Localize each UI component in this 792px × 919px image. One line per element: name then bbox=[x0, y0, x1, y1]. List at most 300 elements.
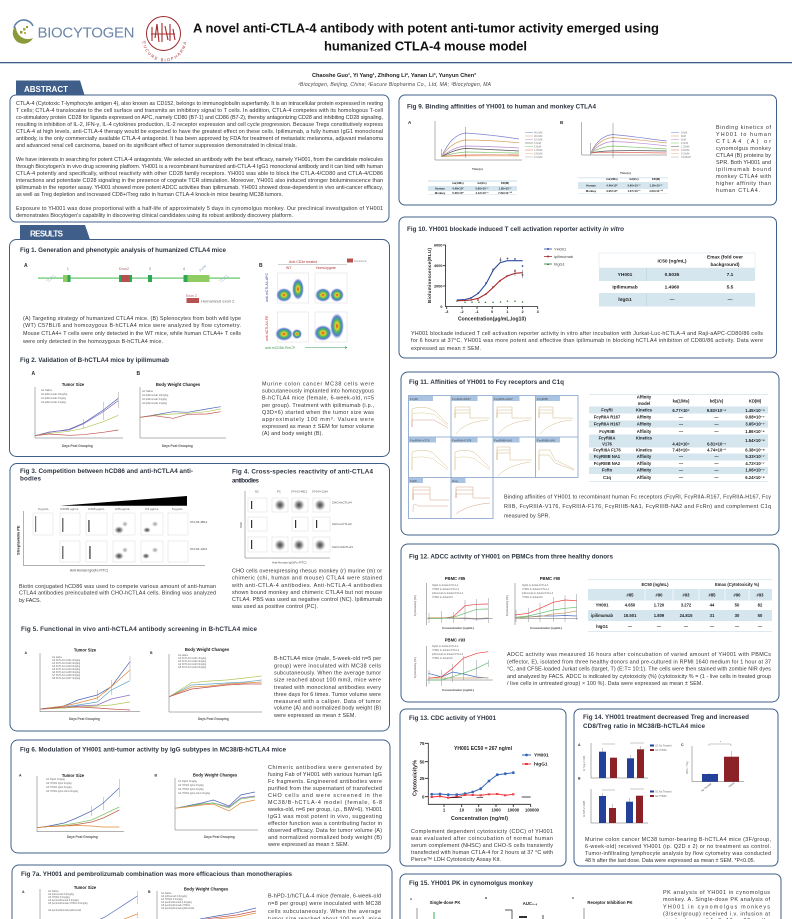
fig 14 caption: Murine colon cancer MC38 tumor-bearing B-hCTLA4 mice (3F/group, bbox=[585, 837, 772, 843]
panel: figures 1 and 2 bbox=[10, 240, 390, 456]
fig 10 dose-response chart: Bioluminescence(RLU) bbox=[427, 248, 432, 303]
fig 12 chart: PBMC #93: ipilimumab & Jurkat-hCTLA-4 bbox=[432, 653, 464, 656]
fig 15 caption: monkey. A. Single-dose PK analysis of bbox=[663, 897, 770, 903]
fig 11 table: model bbox=[638, 401, 650, 406]
fig 7a tumor size chart: G4 pembrolizumab 3.0mg/kg bbox=[48, 899, 79, 902]
fig 9A sensorgram: 10.0nM bbox=[534, 138, 542, 142]
fig 7a body weight chart: Body Weight Changes bbox=[184, 886, 229, 892]
fig 15C receptor inhibition chart bbox=[572, 896, 633, 919]
fig 13 caption: serum complement (NHSC) and CHO-S cells transiently bbox=[411, 843, 553, 849]
fig 9A sensorgram: 20.0nM bbox=[534, 135, 542, 138]
results tab: RESULTS bbox=[30, 230, 64, 238]
fig 5B body weight chart: G1 saline bbox=[178, 654, 189, 657]
fig 3 competition flow plots: Anti-Human IgG(Fc-FITC) bbox=[70, 568, 108, 572]
fig 12 heading: Fig 12. ADCC activity of YH001 on PBMCs from three healthy donors bbox=[409, 554, 613, 560]
authors: Chaoshe Guo¹, Yi Yang¹, Zhihong Li², Yanan Li³, Yunyun Chen³ bbox=[312, 72, 476, 79]
fig 6 caption: MC38/B-hCTLA-4 model (female, 6-8 bbox=[268, 800, 382, 806]
fig 14C bar chart: YH001 bbox=[728, 781, 736, 789]
fig 5 caption: B-hCTLA4 mice (male, 5-week-old n=5 per bbox=[274, 656, 381, 662]
fig 9B sensorgram: 0.31nM bbox=[681, 152, 689, 156]
fig 2B body weight chart: Body Weight Changes bbox=[156, 382, 201, 387]
fig 15 caption: (3/sex/group) received i.v. infusion at bbox=[663, 911, 770, 917]
logo: Eucure Biopharma bbox=[142, 16, 186, 62]
fig 15B AUC chart bbox=[485, 896, 543, 919]
fig 7a body weight chart: G4 pembrolizumab 3.0mg/kg bbox=[161, 901, 192, 904]
fig 2B body weight chart: Days Post Grouping bbox=[162, 444, 193, 448]
fig 9B sensorgram: 0.62nM bbox=[681, 149, 689, 152]
fig 6 caption: weeks-old, n=6 per group, i.p., BIW×6). YH001 bbox=[267, 807, 382, 813]
fig 12 chart: PBMC #93: PBMC #93 bbox=[445, 638, 466, 642]
fig 11 table: — bbox=[679, 454, 684, 459]
fig 11 table: Affinity bbox=[637, 454, 652, 459]
fig 7a tumor size chart: G3 YH001 3.0mg/kg bbox=[48, 896, 70, 899]
fig 14C bar chart: * bbox=[720, 740, 722, 744]
fig 12 chart: PBMC #93 bbox=[413, 638, 493, 692]
fig 13 caption bbox=[410, 829, 553, 863]
fig 13 caption: was evaluated after coincubation of normal human bbox=[410, 836, 553, 842]
abstract frame bbox=[10, 95, 389, 222]
fig 9A table: 7.69×10⁻¹⁰ bbox=[498, 191, 513, 195]
fig 9B sensorgram: 0.156nM bbox=[681, 156, 691, 159]
abstract text: co-stimulatory protein CD28 for ligands expressed on APC, namely CD80 (B7-1) and CD86 (B7-2), thereby antagonizing CD28 and inhibiting CD28 signaling, bbox=[16, 115, 384, 121]
fig 1B flow cytometry plots bbox=[259, 258, 367, 350]
fig 7a tumor size chart: G5 pembrolizumab+YH001 3.0mg/kg bbox=[48, 902, 88, 905]
fig 10 caption bbox=[411, 331, 763, 352]
fig 10 table: YH001 bbox=[618, 272, 633, 278]
fig 2 caption: Murine colon cancer MC38 cells were bbox=[262, 382, 374, 388]
fig 10 dose-response chart: 1 bbox=[506, 310, 508, 314]
fig 12 table: #93 bbox=[756, 592, 764, 598]
fig 11 SPR thumbnail grid bbox=[408, 396, 578, 518]
fig 9A table: 5.60×10⁻⁴ bbox=[475, 186, 489, 190]
fig 5A tumor size chart: G5 hCTLA4 mAb4 3mg/kg bbox=[52, 668, 81, 671]
fig 13 CDC chart: 25 bbox=[420, 776, 425, 781]
fig 6B body weight chart: G1 hIgG1 3mg/kg bbox=[178, 780, 198, 783]
fig 10 table: 7.1 bbox=[727, 272, 734, 278]
fig 12 table: EC50 (ng/mL) bbox=[642, 582, 669, 587]
fig 4 caption: shown bound monkey and chimeric CTLA4 but not mouse bbox=[232, 590, 382, 596]
fig 9A sensorgram: A bbox=[408, 120, 412, 125]
fig 3 competition flow plots: 5 µg/mL bbox=[172, 507, 183, 511]
fig 10 dose-response chart: -2 bbox=[460, 310, 464, 314]
fig 12 caption: (effector, E), isolated from three healthy donors and pre-cultured in RPMI 1640 medium for 1 hour at 37 bbox=[507, 659, 771, 665]
panel: figure 10 bbox=[399, 217, 776, 358]
fig 11 table: 6.24×10⁻⁸ bbox=[745, 475, 765, 480]
fig 9 caption: cynomolgus monkey bbox=[716, 146, 771, 152]
fig 5B body weight chart: G3 hCTLA4 mAb2 3mg/kg bbox=[178, 660, 207, 663]
abstract text: We have interests in searching for potent CTLA-4 antagonists. We selected an antibody with the best efficacy, namely YH001, from the candidate molecules bbox=[16, 157, 383, 163]
fig 6A tumor size chart: G2 YH001 IgG1 3mg/kg bbox=[46, 782, 72, 785]
fig 4 cross-species flow plots: NC bbox=[255, 490, 259, 494]
fig 9 caption: monkey CTLA4 with bbox=[716, 174, 771, 180]
abstract text: antibody, is the only commercially available CTLA-4 antagonist. It has been approved by FDA for treatment of metastatic melanoma, adjuvant melanoma bbox=[16, 136, 383, 142]
fig 5A tumor size chart: G8 hCTLA4 mAb7 3mg/kg bbox=[52, 677, 81, 680]
fig 2 caption: Q3D×6) started when the tumor size was bbox=[262, 410, 374, 416]
fig 15 heading: Fig 15. YH001 PK in cynomolgus monkey bbox=[409, 880, 533, 887]
fig 1A targeting diagram: 3 bbox=[149, 267, 151, 271]
fig 5 caption: measured with a caliper. Data of tumor bbox=[274, 699, 381, 705]
fig 11 table: — bbox=[714, 468, 719, 473]
fig 14B bar chart: G1 No Treated bbox=[655, 790, 672, 794]
fig 12 table: YH001 bbox=[596, 602, 609, 608]
fig 11 table: FcγRIIIB NA2 bbox=[594, 461, 621, 466]
fig 6B body weight chart: Days Post Grouping bbox=[204, 835, 235, 839]
fig 3 heading: bodies bbox=[20, 476, 41, 483]
fig 5B body weight chart: Days Post Grouping bbox=[198, 717, 229, 721]
results tab bbox=[20, 225, 90, 240]
fig 14C bar chart: No Treated bbox=[701, 782, 713, 793]
fig 10 dose-response chart: 6000 bbox=[434, 244, 442, 248]
fig 9B sensorgram bbox=[560, 120, 691, 175]
fig 6B body weight chart: G4 YH001 IgG1-LALA 3mg/kg bbox=[178, 792, 211, 795]
fig 11 SPR thumbnail grid: C1q bbox=[452, 479, 458, 483]
panel: figures 3, 4 and 5 bbox=[10, 464, 390, 731]
fig 12 table: 30 bbox=[735, 613, 740, 618]
fig 14 caption: Tumor-infiltrating lymphocyte analysis by flow cytometry was conducted bbox=[585, 851, 771, 857]
fig 7a tumor size chart: G6 pembrolizumab+ipilimumab bbox=[48, 909, 82, 912]
fig 14A bar chart: % Treg of CD4 bbox=[583, 755, 586, 771]
fig 15B AUC chart: B bbox=[485, 896, 488, 900]
fig 9A table: ka(1/Ms) bbox=[452, 181, 464, 185]
fig 9B table: Monkey bbox=[586, 189, 597, 193]
fig 2 caption: expressed as mean ± SEM for tumor volume bbox=[262, 424, 374, 430]
panel: figure 15 bbox=[400, 874, 781, 919]
fig 11 caption: RIIB, FcγRIIIA-V176, FcγRIIIA-F176, FcγRIIIB-NA1, FcγRIIIB-NA2 and FcRn) and complement C1q bbox=[504, 504, 771, 510]
fig 10 table: — bbox=[670, 298, 675, 303]
fig 11 table: — bbox=[714, 422, 719, 426]
fig 14 heading: Fig 14. YH001 treatment decreased Treg and increased bbox=[583, 714, 749, 721]
fig 12 table: 31 bbox=[710, 613, 715, 618]
abstract text: resulting in inhibition of IL-2, IFN-γ, IL-4 cytokines production, IL-2 receptor expression and cell cycle progression. Because Tregs constitutively express bbox=[16, 122, 383, 128]
fig 12 chart: PBMC #93: Concentration (ng/mL) bbox=[442, 688, 474, 692]
fig 3 caption: by FACS. bbox=[19, 598, 41, 604]
fig 10 dose-response chart: 4000 bbox=[434, 264, 442, 268]
fig 6 caption: were expressed as mean ± SEM. bbox=[267, 842, 349, 848]
abstract text bbox=[16, 101, 384, 219]
fig 1B flow cytometry plots: Homozygote bbox=[316, 266, 336, 270]
abstract text: CTLA-4 at high levels, anti-CTLA-4 therapy would be expected to have the greatest effect on these cells. Ipilimumab, a fully human IgG1 monoclonal bbox=[16, 129, 383, 135]
fig 11 table: — bbox=[714, 475, 719, 480]
fig 13 caption: Complement dependent cytotoxicity (CDC) of YH001 bbox=[411, 829, 553, 835]
fig 1 caption: (A) Targeting strategy of humanized CTLA4 mice. (B) Splenocytes from both wild type bbox=[23, 316, 241, 322]
fig 11 SPR thumbnail grid: FcγRIIIA-V176 bbox=[410, 438, 430, 442]
panel: figure 12 bbox=[401, 544, 779, 702]
fig 12 caption: ADCC activity was measured 16 hours after coincubation of varied amount of YH001 with PBMCs bbox=[507, 652, 771, 658]
frame bbox=[400, 874, 781, 919]
fig 2B body weight chart: G3 ipilimumab 3mg/kg bbox=[142, 398, 167, 401]
fig 9A table: Human bbox=[435, 186, 445, 190]
fig 12 chart: PBMC #85: Cytotoxicity (%) bbox=[413, 595, 417, 616]
fig 5B body weight chart: G4 hCTLA4 mAb3 3mg/kg bbox=[178, 663, 207, 666]
fig 3 caption bbox=[19, 584, 216, 604]
fig 9A table: KD(M) bbox=[501, 181, 509, 185]
fig 9A sensorgram bbox=[408, 120, 542, 171]
fig 11 table: 6.77×10⁵ bbox=[672, 408, 690, 413]
fig 11 table: FcγRI bbox=[601, 408, 613, 412]
fig 2 caption bbox=[262, 382, 374, 437]
fig 7a body weight chart: G6 pembrolizumab+ipilimumab bbox=[161, 907, 195, 910]
fig 5 heading: Fig 5. Functional in vivo anti-hCTLA4 antibody screening in B-hCTLA4 mice bbox=[21, 626, 257, 633]
fig 12 chart: PBMC #90 bbox=[505, 576, 578, 630]
fig 13 CDC chart: YH001 EC50 = 267 ng/ml bbox=[454, 746, 513, 752]
fig 10 legend: hIgG1 bbox=[554, 262, 566, 266]
fig 10 table: 0.5035 bbox=[665, 272, 680, 278]
fig 15 caption bbox=[663, 890, 770, 919]
fig 11 table: 1.06×10⁻⁷ bbox=[745, 468, 765, 473]
fig 15B AUC chart: AUC₀₋ₜ bbox=[523, 901, 538, 906]
fig 4 caption: was used as positive control (PC). bbox=[231, 604, 318, 610]
fig 13 CDC chart: 1000 bbox=[491, 808, 501, 812]
fig 11 table: — bbox=[679, 475, 684, 480]
fig 9 caption: YH001 to human bbox=[716, 132, 771, 138]
abstract text: interactions and potentiate CD28 signaling in the presence of cognate TCR stimulation. Moreover, YH001 also induced stronger bioluminescence than bbox=[16, 178, 383, 184]
fig 12 table: 15.501 bbox=[624, 613, 637, 618]
fig 11 table: — bbox=[679, 468, 684, 473]
fig 4 caption: CHO cells overexpressing rhesus monkey (r) murine (m) or bbox=[232, 568, 382, 574]
frame bbox=[11, 740, 390, 853]
fig 11 SPR thumbnail grid: FcRn bbox=[410, 479, 417, 483]
fig 9B sensorgram: 5nM bbox=[681, 138, 686, 142]
fig 6 caption: purified from the supernatant of transfected bbox=[268, 786, 382, 792]
fig 9B sensorgram: Time(s) bbox=[620, 171, 631, 175]
fig 6 caption bbox=[267, 765, 382, 848]
fig 9B sensorgram: 8nM bbox=[681, 135, 686, 138]
fig 5A tumor size chart: Tumor Size bbox=[74, 648, 97, 652]
fig 2B body weight chart: G1 Saline bbox=[142, 390, 154, 393]
fig 9 caption: CTLA4 (B) proteins by bbox=[716, 153, 771, 159]
title: A novel anti-CTLA-4 antibody with potent anti-tumor activity emerged using bbox=[193, 21, 659, 36]
fig 13 legend bbox=[522, 753, 549, 768]
fig 1A targeting diagram: A bbox=[24, 263, 28, 269]
abstract tab bbox=[16, 80, 84, 95]
fig 6A tumor size chart: Days Post Grouping bbox=[67, 835, 98, 839]
fig 6B body weight chart: Body Weight Changes bbox=[193, 772, 238, 778]
fig 3 competition flow plots: 074-04-12b4 bbox=[190, 547, 207, 551]
fig 12 table: — bbox=[628, 624, 633, 629]
fig 12 table: 50 bbox=[758, 613, 763, 618]
fig 3 competition flow plots: 0.5 µg/mL bbox=[145, 507, 159, 511]
fig 7a tumor size chart: G2 ipilimumab 3.0mg/kg bbox=[48, 893, 74, 896]
fig 5 caption: size reached about 100 mm3, mice were bbox=[274, 678, 381, 684]
fig 2B body weight chart: G4 ipilimumab 1mg/kg bbox=[142, 402, 167, 405]
fig 11 table: FcγRIIA R167 bbox=[594, 414, 621, 420]
fig 15C receptor inhibition chart: C bbox=[572, 896, 575, 900]
fig 14A bar chart: G1 No Treated bbox=[655, 744, 672, 748]
fig 1A targeting diagram: Exon 2 bbox=[186, 294, 197, 298]
fig 9B sensorgram: B bbox=[560, 120, 564, 125]
fig 3 heading bbox=[20, 468, 193, 483]
fig 2 caption: per group). Treatment with ipilimumab (i.p., bbox=[262, 403, 374, 409]
fig 14 heading bbox=[583, 714, 749, 730]
fig 12 chart: PBMC #85: ipilimumab & Jurkat-hCTLA-4 bbox=[432, 592, 464, 595]
fig 13 caption: Pierce™ LDH Cytotoxicity Assay Kit. bbox=[411, 857, 501, 863]
fig 1A targeting diagram: 4 bbox=[183, 267, 185, 271]
fig 14C bar chart: C bbox=[681, 743, 684, 747]
fig 13 legend: YH001 bbox=[534, 753, 549, 759]
fig 14C bar chart: CD8+ / Treg bbox=[686, 761, 689, 774]
fig 9A table: Monkey bbox=[435, 191, 446, 195]
abstract text: through Biocytogen's in vivo drug screening platform. YH001 is a recombinant humanized anti-CTLA-4 IgG1 monoclonal antibody and it can bind with human bbox=[16, 164, 383, 170]
fig 12 table: — bbox=[657, 624, 662, 629]
fig 11 table: Kinetics bbox=[636, 448, 653, 452]
fig 2A tumor size chart: A bbox=[32, 371, 36, 377]
fig 11 table: kd(1/s) bbox=[710, 398, 724, 404]
fig 11 table: KD(M) bbox=[749, 398, 762, 404]
fig 2B body weight chart bbox=[136, 371, 226, 448]
fig 6A tumor size chart: A bbox=[19, 774, 22, 778]
fig 12 caption: and analyzed by FACS. ADCC is indicated by cytotoxicity (%) (cytotoxicity % = (1 - live cells in treated group bbox=[507, 674, 771, 680]
fig 11 table: 7.43×10⁴ bbox=[672, 448, 690, 452]
fig 13 heading: Fig 13. CDC activity of YH001 bbox=[409, 715, 496, 722]
fig 4 cross-species flow plots: CHO-rhCTLA4 bbox=[332, 500, 352, 504]
fig 11 table: ka(1/Ms) bbox=[673, 398, 690, 404]
fig 7a body weight chart: B bbox=[148, 890, 151, 894]
fig 3 competition flow plots: 0 µg/mL bbox=[38, 507, 49, 511]
fig 7a body weight chart: G1 Saline bbox=[161, 892, 172, 895]
frame bbox=[574, 709, 778, 866]
fig 7a caption: n=8 per group) were inoculated with MC38 bbox=[268, 901, 381, 907]
fig 11 table: C1q bbox=[603, 475, 611, 480]
frame bbox=[12, 865, 392, 919]
fig 10 dose-response chart: 2000 bbox=[434, 284, 442, 288]
fig 12 chart: PBMC #90: Concentration (ng/mL) bbox=[530, 626, 562, 630]
fig 2B body weight chart: B bbox=[136, 371, 140, 377]
fig 10 dose-response chart: 0 bbox=[491, 310, 493, 314]
panel: figure 13 bbox=[400, 709, 566, 866]
fig 11 table: FcγRIIB bbox=[599, 429, 615, 434]
fig 11 table: 3.95×10⁻⁷ bbox=[745, 422, 765, 426]
fig 5 caption bbox=[273, 656, 381, 719]
fig 13 CDC chart: 50 bbox=[420, 760, 425, 764]
fig 7a body weight chart: G5 pembrolizumab+YH001 bbox=[161, 904, 191, 907]
fig 11 table: FcγRIIA H167 bbox=[594, 422, 621, 426]
fig 9A sensorgram: 0.31nM bbox=[534, 156, 542, 159]
fig 7a tumor size chart: G1 Saline bbox=[48, 890, 59, 893]
fig 5 caption: were expressed as mean ± SEM. bbox=[273, 713, 356, 719]
fig 11 caption bbox=[504, 494, 771, 519]
abstract tab: ABSTRACT bbox=[24, 85, 68, 94]
fig 2A tumor size chart bbox=[32, 371, 123, 448]
fig 11 table: Kinetics bbox=[636, 408, 653, 412]
fig 9B table: 5.60×10⁻⁴ bbox=[627, 184, 641, 188]
fig 6 caption: effector function was a contributing factor in bbox=[268, 821, 382, 827]
fig 2A tumor size chart: G4 ipilimumab 1mg/kg bbox=[41, 401, 66, 404]
fig 9B table: 3.95×10⁵ bbox=[606, 189, 618, 193]
fig 5 caption: volume (A) and normalized body weight (B) bbox=[274, 706, 381, 712]
fig 13 CDC chart: 10 bbox=[459, 808, 465, 812]
fig 10 table: ipilimumab bbox=[612, 284, 638, 290]
fig 3 competition flow plots: 0.0005 µg/mL bbox=[60, 507, 79, 511]
abstract text: ipilimumab in the reporter assay. YH001 showed more potent ADCC activities than ipilimumab. YH001 showed dose-dependent in vivo anti-cancer efficacy, bbox=[16, 185, 384, 191]
fig 11 table: — bbox=[714, 454, 719, 459]
fig 11 table: FcRn bbox=[602, 468, 613, 473]
fig 11 table: 4.74×10⁻² bbox=[707, 448, 727, 452]
fig 13 CDC chart: Concentration (ng/ml) bbox=[451, 816, 508, 822]
fig 7a tumor size chart: A bbox=[22, 890, 25, 894]
fig 12 table: — bbox=[735, 624, 740, 629]
frame bbox=[10, 240, 390, 456]
fig 4 caption: with anti-CTLA-4 antibodies. Anti-hCTLA-4 antibodies bbox=[231, 583, 382, 589]
fig 9A sensorgram: 2.5nM bbox=[534, 146, 541, 148]
fig 9A sensorgram: Time(s) bbox=[472, 167, 483, 171]
fig 13 CDC chart bbox=[412, 741, 540, 822]
fig 12 table: — bbox=[758, 624, 763, 629]
fig 9 caption bbox=[716, 125, 772, 194]
fig 1A targeting diagram: Exon2 bbox=[119, 267, 129, 271]
fig 13 caption: transfected with human CTLA-4 for 2 hours at 37 °C with bbox=[411, 850, 553, 856]
fig 10 table: 5.5 bbox=[727, 284, 734, 290]
fig 12 table: 82 bbox=[758, 602, 763, 608]
fig 9A table: kd(1/s) bbox=[477, 181, 487, 185]
fig 10 dose-response chart: 2 bbox=[521, 310, 524, 314]
fig 9B sensorgram: 2.5nM bbox=[681, 142, 688, 145]
fig 11 table: — bbox=[679, 461, 684, 466]
header rule bbox=[0, 62, 792, 63]
fig 9A sensorgram: 5.0nM bbox=[534, 142, 541, 145]
fig 11 table: Affinity bbox=[637, 422, 652, 426]
fig 5A tumor size chart bbox=[24, 648, 140, 721]
fig 11 table: Affinity bbox=[637, 414, 652, 420]
fig 2A tumor size chart: Days Post Grouping bbox=[62, 444, 93, 448]
panel: abstract bbox=[10, 80, 389, 222]
fig 14C bar chart bbox=[681, 740, 744, 793]
fig 4 cross-species flow plots: CHO-mCTLA4 bbox=[332, 522, 352, 526]
abstract text: demonstrates Biocytogen's capability in discovering clinical candidates using its robust antibody discovery platform. bbox=[16, 213, 293, 219]
fig 4 cross-species flow plots: Anti-Human IgG(Fc-FITC) bbox=[272, 560, 307, 564]
fig 12 table: 4.650 bbox=[625, 602, 636, 608]
fig 10 dose-response chart: -1 bbox=[475, 310, 479, 314]
fig 5 caption: three days for 6 times. Tumor volume were bbox=[274, 692, 381, 698]
title bbox=[193, 21, 659, 54]
fig 6A tumor size chart: G1 hIgG1 3mg/kg bbox=[46, 778, 66, 781]
fig 9B table: 4.23×10⁻¹⁰ bbox=[649, 189, 664, 193]
logo: Eucure Biopharma: EUCURE BIOPHARMA bbox=[142, 41, 186, 62]
fig 5A tumor size chart: G7 hCTLA4 mAb6 3mg/kg bbox=[52, 674, 81, 677]
fig 15A single-dose PK chart: A bbox=[410, 897, 413, 901]
fig 12 chart: PBMC #90: YH001 & Jurkat-NC bbox=[522, 596, 543, 599]
fig 9 caption: SPR. Both YH001 and bbox=[716, 160, 771, 166]
fig 11 table: 9.83×10⁻⁴ bbox=[707, 408, 726, 413]
frame bbox=[400, 709, 566, 866]
fig 12 caption: °C, and CFSE-loaded Jurkat cells (target, T) (E:T= 10:1). The cells were then stained with zombie NIR dyes bbox=[507, 666, 771, 672]
fig 14A bar chart bbox=[578, 743, 672, 778]
fig 1 caption bbox=[22, 316, 241, 345]
fig 12 caption bbox=[507, 652, 771, 687]
fig 5A tumor size chart: G3 hCTLA4 mAb2 3mg/kg bbox=[52, 662, 81, 665]
fig 5A tumor size chart: G6 hCTLA4 mAb5 3mg/kg bbox=[52, 671, 81, 674]
fig 5B body weight chart: G5 hCTLA4 mAb4 3mg/kg bbox=[178, 666, 207, 669]
fig 2A tumor size chart: G1 Saline bbox=[41, 389, 53, 392]
fig 11 table: — bbox=[679, 429, 684, 434]
fig 9B table: kd(1/s) bbox=[629, 177, 639, 181]
fig 15 caption: YH001 in cynomolgus monkeys bbox=[663, 904, 770, 910]
fig 12 chart: PBMC #90: hIgG1 & Jurkat-hCTLA-4 bbox=[522, 584, 549, 587]
fig 11 caption: measured by SPR. bbox=[504, 513, 550, 519]
logo: Biocytogen: BIOCYTOGEN bbox=[38, 24, 134, 42]
fig 11 SPR thumbnail grid: FcγRIIB bbox=[537, 397, 548, 401]
fig 7a body weight chart bbox=[148, 886, 256, 919]
fig 2A tumor size chart: G2 ipilimumab 10mg/kg bbox=[41, 393, 68, 396]
fig 13 CDC chart: 0 bbox=[422, 794, 425, 800]
fig 4 caption bbox=[231, 568, 382, 610]
frame bbox=[401, 544, 779, 702]
fig 12 caption: / live cells in untreated group) × 100 %). Data were expressed as mean ± SEM. bbox=[507, 681, 703, 687]
fig 11 table: Affinity bbox=[637, 475, 652, 480]
fig 4 caption: CTLA4. PBS was used as negative control (NC). Ipilimumab bbox=[232, 597, 382, 603]
fig 6B body weight chart bbox=[154, 772, 258, 839]
fig 12 chart: PBMC #93: YH001 & Jurkat-NC bbox=[432, 657, 453, 660]
fig 6B body weight chart: G2 YH001 IgG1 3mg/kg bbox=[178, 784, 204, 787]
